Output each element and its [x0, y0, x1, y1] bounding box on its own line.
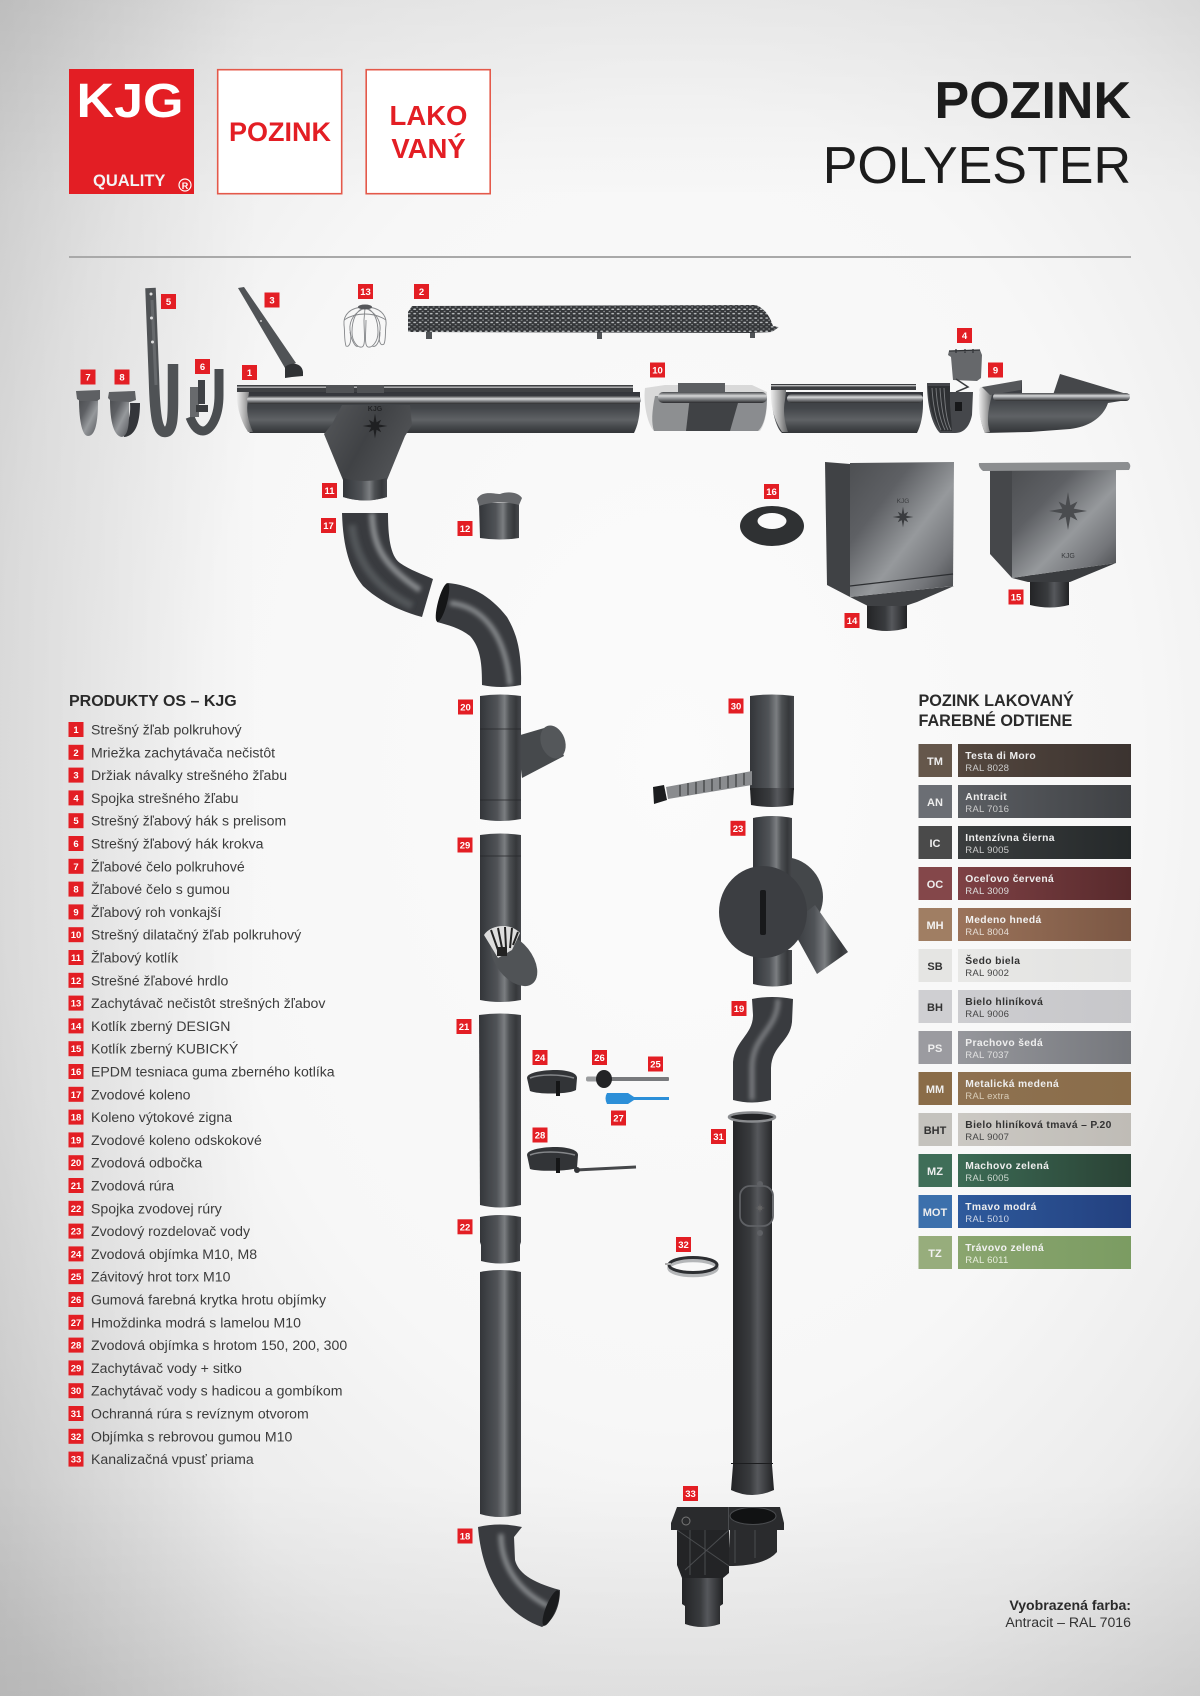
- list number badges: 7: [73, 862, 79, 873]
- shade TZ: Trávovo zelená: [965, 1243, 1044, 1254]
- list number badges: 15: [71, 1044, 82, 1055]
- list number badges: 5: [73, 816, 79, 827]
- list number badges: 2: [73, 748, 79, 759]
- number markers on illustration: 21: [459, 1022, 470, 1033]
- product: clamp with rod 28: [527, 1147, 636, 1173]
- shade MM: [918, 1072, 1131, 1105]
- product: blue plug 27: [606, 1093, 669, 1104]
- list item labels: Kanalizačná vpusť priama: [91, 1451, 254, 1467]
- list item labels: Strešný žľab polkruhový: [91, 722, 243, 738]
- shade TM: TM: [927, 756, 943, 768]
- number markers on illustration: 17: [323, 521, 334, 532]
- list item labels: Gumová farebná krytka hrotu objímky: [91, 1292, 327, 1308]
- product: clamp 24: [527, 1070, 577, 1096]
- shade BHT: Bielo hliníková tmavá – P.20: [965, 1120, 1112, 1131]
- title: POLYESTER: [823, 137, 1131, 195]
- number markers on illustration: 8: [119, 372, 125, 384]
- panel: product list: [68, 693, 347, 1467]
- product: rafter hook 6: [190, 369, 219, 431]
- list item labels: Zvodový rozdelovač vody: [91, 1223, 251, 1239]
- shade SB: Šedo biela: [965, 954, 1020, 967]
- list item labels: Zvodová odbočka: [91, 1155, 202, 1171]
- list item labels: Zachytávač vody s hadicou a gombíkom: [91, 1383, 342, 1399]
- list number badges: 11: [71, 953, 82, 964]
- number markers on illustration: 25: [650, 1060, 661, 1070]
- number markers on illustration: 2: [419, 287, 424, 298]
- list item labels: Kotlík zberný KUBICKÝ: [91, 1041, 239, 1057]
- note: shown colour: Vyobrazená farba:: [1009, 1597, 1131, 1613]
- outlet funnel: [324, 405, 412, 500]
- product: protective pipe 31: [729, 1112, 775, 1495]
- product: rubber seal 16: [740, 506, 804, 546]
- number markers on illustration: 22: [460, 1222, 470, 1233]
- shade IC: [918, 826, 1131, 859]
- number markers on illustration: 31: [713, 1132, 724, 1143]
- list item labels: Závitový hrot torx M10: [91, 1269, 231, 1285]
- badge: LAKOVANÝ: LAKO: [390, 100, 467, 131]
- product: water distributor 23: [719, 816, 848, 986]
- product: pipe coupling 22: [480, 1215, 521, 1264]
- list number badges: 18: [71, 1113, 81, 1124]
- shade TZ: RAL 6011: [965, 1255, 1009, 1266]
- badge: LAKOVANÝ: [366, 70, 490, 194]
- shade MOT: [918, 1195, 1131, 1228]
- list number badges: 3: [73, 771, 79, 782]
- list number badges: 9: [73, 907, 79, 918]
- product: gutter hook 5: [150, 288, 173, 432]
- shade MM: RAL extra: [965, 1091, 1010, 1102]
- shade BHT: [918, 1113, 1131, 1146]
- product: outer gutter corner 9: [979, 374, 1130, 433]
- product: cubic collector box 15: [979, 462, 1130, 608]
- list item labels: Zvodová objímka s hrotom 150, 200, 300: [91, 1337, 347, 1353]
- number markers on illustration: 20: [460, 702, 471, 714]
- product: clamp 32: [665, 1258, 717, 1276]
- list number badges: 26: [71, 1295, 81, 1306]
- shade PS: Prachovo šedá: [965, 1038, 1043, 1049]
- shade OC: RAL 3009: [965, 886, 1009, 897]
- number markers on illustration: 30: [731, 702, 741, 712]
- shade TZ: TZ: [928, 1248, 942, 1260]
- list item labels: Koleno výtokové zigna: [91, 1109, 232, 1125]
- list item labels: Strešný žľabový hák krokva: [91, 836, 264, 852]
- list item labels: Žľabový roh vonkajší: [91, 904, 221, 920]
- list number badges: 25: [71, 1272, 82, 1283]
- shade IC: Intenzívna čierna: [965, 833, 1055, 844]
- product: collector box 14: KJG: [897, 498, 909, 505]
- panel heading: POZINK LAKOVANÝ: [918, 691, 1074, 710]
- list number badges: 27: [71, 1318, 81, 1329]
- panel heading: [918, 691, 1074, 730]
- shade SB: [918, 949, 1131, 982]
- list item labels: Zvodová rúra: [91, 1178, 174, 1194]
- shade TM: [918, 744, 1131, 777]
- logo: KJG Quality: R: [182, 181, 189, 191]
- list number badges: 23: [71, 1227, 81, 1238]
- badge: POZINK: [218, 70, 342, 194]
- number markers on illustration: 29: [460, 840, 470, 852]
- shade TZ: [918, 1236, 1131, 1269]
- list item labels: Strešné žľabové hrdlo: [91, 972, 228, 988]
- product: downpipe neck 12: [477, 492, 522, 540]
- logo: KJG Quality: [69, 69, 194, 194]
- product: sewer inlet 33: [671, 1507, 784, 1627]
- shade MH: Medeno hnedá: [965, 915, 1042, 926]
- list number badges: 16: [71, 1067, 81, 1078]
- number markers on illustration: 4: [962, 331, 968, 342]
- shade BH: BH: [927, 1002, 943, 1014]
- list item labels: Spojka strešného žľabu: [91, 790, 238, 806]
- shade MH: [918, 908, 1131, 941]
- list item labels: Strešný dilatačný žľab polkruhový: [91, 927, 302, 943]
- number markers on illustration: 5: [166, 297, 172, 308]
- list number badges: 22: [71, 1204, 81, 1215]
- list item labels: [91, 722, 347, 1467]
- list number badges: 28: [71, 1341, 81, 1352]
- shade IC: IC: [930, 838, 941, 850]
- list number badges: 20: [71, 1158, 81, 1169]
- shade PS: PS: [928, 1043, 942, 1055]
- shade MOT: Tmavo modrá: [965, 1202, 1037, 1213]
- list item labels: Žľabové čelo polkruhové: [91, 858, 245, 874]
- number markers on illustration: 11: [324, 486, 335, 497]
- shade MH: MH: [926, 920, 944, 932]
- shade MM: Metalická medená: [965, 1079, 1059, 1090]
- list number badges: 24: [71, 1249, 82, 1260]
- list item labels: Kotlík zberný DESIGN: [91, 1018, 230, 1034]
- shade MOT: RAL 5010: [965, 1214, 1009, 1225]
- list number badges: 17: [71, 1090, 81, 1101]
- list item labels: EPDM tesniaca guma zberného kotlíka: [91, 1064, 335, 1080]
- list number badges: 12: [71, 976, 81, 987]
- list number badges: 13: [71, 999, 81, 1010]
- shade MZ: [918, 1154, 1131, 1187]
- shade MZ: MZ: [927, 1166, 943, 1178]
- list number badges: 10: [71, 930, 81, 941]
- shade BHT: BHT: [924, 1125, 947, 1137]
- shade SB: RAL 9002: [965, 968, 1009, 979]
- note: shown colour: [1005, 1597, 1131, 1630]
- product: strainer 13: [344, 304, 386, 347]
- list item labels: Spojka zvodovej rúry: [91, 1200, 223, 1216]
- badge: POZINK: POZINK: [229, 117, 331, 147]
- list number badges: 32: [71, 1432, 81, 1443]
- product: water catcher with hose 30: [653, 694, 794, 807]
- list item labels: Žľabové čelo s gumou: [91, 881, 230, 897]
- shade OC: [918, 867, 1131, 900]
- list heading: PRODUKTY OS – KJG: [69, 693, 237, 710]
- list item labels: Zvodové koleno: [91, 1086, 191, 1102]
- product: outlet elbow 18: [478, 1524, 563, 1627]
- list item labels: Mriežka zachytávača nečistôt: [91, 744, 275, 760]
- list item labels: Ochranná rúra s revíznym otvorom: [91, 1406, 309, 1422]
- product: downpipe elbow 17: [342, 513, 433, 617]
- panel heading: FAREBNÉ ODTIENE: [918, 711, 1072, 730]
- list number badges: 14: [71, 1021, 82, 1032]
- shade BHT: RAL 9007: [965, 1132, 1009, 1143]
- shade BH: RAL 9006: [965, 1009, 1009, 1020]
- list item labels: Hmoždinka modrá s lamelou M10: [91, 1314, 301, 1330]
- list number badges: 4: [73, 793, 79, 804]
- product: bracket 3: [238, 287, 303, 378]
- list item labels: Zvodová objímka M10, M8: [91, 1246, 257, 1262]
- product: downpipe long: [480, 1270, 521, 1517]
- product: roof gutter with outlet 1 and 11: [237, 385, 641, 500]
- product: downpipe branch 20: [480, 694, 570, 821]
- number markers on illustration: 6: [200, 362, 205, 373]
- product: cubic collector box 15: KJG: [1061, 553, 1075, 560]
- product: dilatation gutter 10: [645, 383, 767, 431]
- shade MOT: MOT: [923, 1207, 947, 1219]
- shade PS: [918, 1031, 1131, 1064]
- product: downpipe 21: [479, 1014, 521, 1208]
- list number badges: [68, 722, 84, 1467]
- number markers on illustration: 33: [685, 1489, 696, 1500]
- shade AN: AN: [927, 797, 943, 809]
- product: collector box 14: [825, 462, 954, 631]
- list item labels: Držiak návalky strešného žľabu: [91, 767, 287, 783]
- number markers on illustration: 27: [613, 1114, 624, 1124]
- list number badges: 31: [71, 1409, 82, 1420]
- number markers on illustration: 23: [733, 824, 743, 835]
- number markers on illustration: 3: [269, 296, 275, 306]
- product: gutter inner corner piece: [927, 383, 973, 433]
- number markers on illustration: 1: [247, 368, 253, 379]
- title: POZINK: [935, 72, 1131, 130]
- badge: LAKOVANÝ: VANÝ: [391, 133, 466, 164]
- list item labels: Žľabový kotlík: [91, 950, 179, 966]
- product: gutter connector 4: [948, 349, 982, 392]
- list number badges: 1: [73, 725, 79, 736]
- logo: KJG Quality: KJG: [76, 75, 184, 128]
- panel: colour shades: [918, 691, 1131, 1269]
- shade AN: RAL 7016: [965, 804, 1009, 815]
- number markers on illustration: 12: [460, 524, 470, 535]
- list number badges: 33: [71, 1455, 81, 1466]
- shade BH: [918, 990, 1131, 1023]
- number markers on illustration: 26: [594, 1053, 605, 1064]
- shade MZ: RAL 6005: [965, 1173, 1009, 1184]
- shade AN: [918, 785, 1131, 818]
- number markers on illustration: 24: [535, 1053, 546, 1064]
- list number badges: 6: [73, 839, 79, 850]
- list number badges: 19: [71, 1135, 81, 1146]
- number markers on illustration: 10: [652, 366, 663, 376]
- product: gutter segment: [771, 384, 923, 433]
- shade OC: Oceľovo červená: [965, 874, 1054, 885]
- number markers on illustration: 28: [535, 1130, 545, 1142]
- product: gutter end cap 7: [76, 390, 100, 436]
- logo: KJG Quality: QUALITY: [93, 172, 165, 190]
- number markers on illustration: 15: [1011, 592, 1022, 604]
- number markers on illustration: 9: [993, 366, 998, 376]
- number markers on illustration: 13: [360, 287, 371, 298]
- product: mesh gutter guard 2: [408, 305, 779, 339]
- shade MM: MM: [926, 1084, 944, 1096]
- shade AN: Antracit: [965, 792, 1007, 803]
- shade MH: RAL 8004: [965, 927, 1010, 938]
- shade TM: Testa di Moro: [965, 751, 1036, 762]
- list number badges: 30: [71, 1386, 81, 1397]
- shade BH: Bielo hliníková: [965, 997, 1043, 1008]
- number markers on illustration: 7: [85, 372, 91, 384]
- list item labels: Zachytávač nečistôt strešných žľabov: [91, 995, 325, 1011]
- product: water catcher with screen 29: [480, 834, 547, 1002]
- shade TM: RAL 8028: [965, 763, 1009, 774]
- shade PS: RAL 7037: [965, 1050, 1009, 1061]
- list number badges: 21: [71, 1181, 82, 1192]
- product: offset elbow 19: [733, 997, 793, 1102]
- list item labels: Zvodové koleno odskokové: [91, 1132, 262, 1148]
- number markers on illustration: 18: [460, 1532, 470, 1542]
- shade IC: RAL 9005: [965, 845, 1009, 856]
- shade SB: SB: [927, 961, 943, 973]
- product: roof gutter with outlet 1 and 11: KJG: [368, 406, 383, 413]
- list number badges: 29: [71, 1363, 81, 1374]
- shade MZ: Machovo zelená: [965, 1161, 1049, 1172]
- number markers on illustration: 32: [678, 1240, 689, 1251]
- number markers on illustration: 19: [734, 1004, 744, 1015]
- number markers on illustration: 14: [847, 616, 858, 627]
- product: screw and rubber cap 25 26: [586, 1070, 669, 1088]
- list item labels: Objímka s rebrovou gumou M10: [91, 1428, 292, 1444]
- list item labels: Zachytávač vody + sitko: [91, 1360, 242, 1376]
- note: shown colour: Antracit – RAL 7016: [1005, 1614, 1131, 1630]
- number markers on illustration: [80, 284, 1024, 1544]
- shade OC: OC: [927, 879, 943, 891]
- title: [823, 72, 1131, 195]
- list item labels: Strešný žľabový hák s prelisom: [91, 813, 286, 829]
- list number badges: 8: [73, 885, 79, 896]
- product: downpipe elbow lower: [433, 582, 521, 687]
- product: gutter end cap with rubber 8: [108, 391, 140, 437]
- number markers on illustration: 16: [766, 487, 777, 498]
